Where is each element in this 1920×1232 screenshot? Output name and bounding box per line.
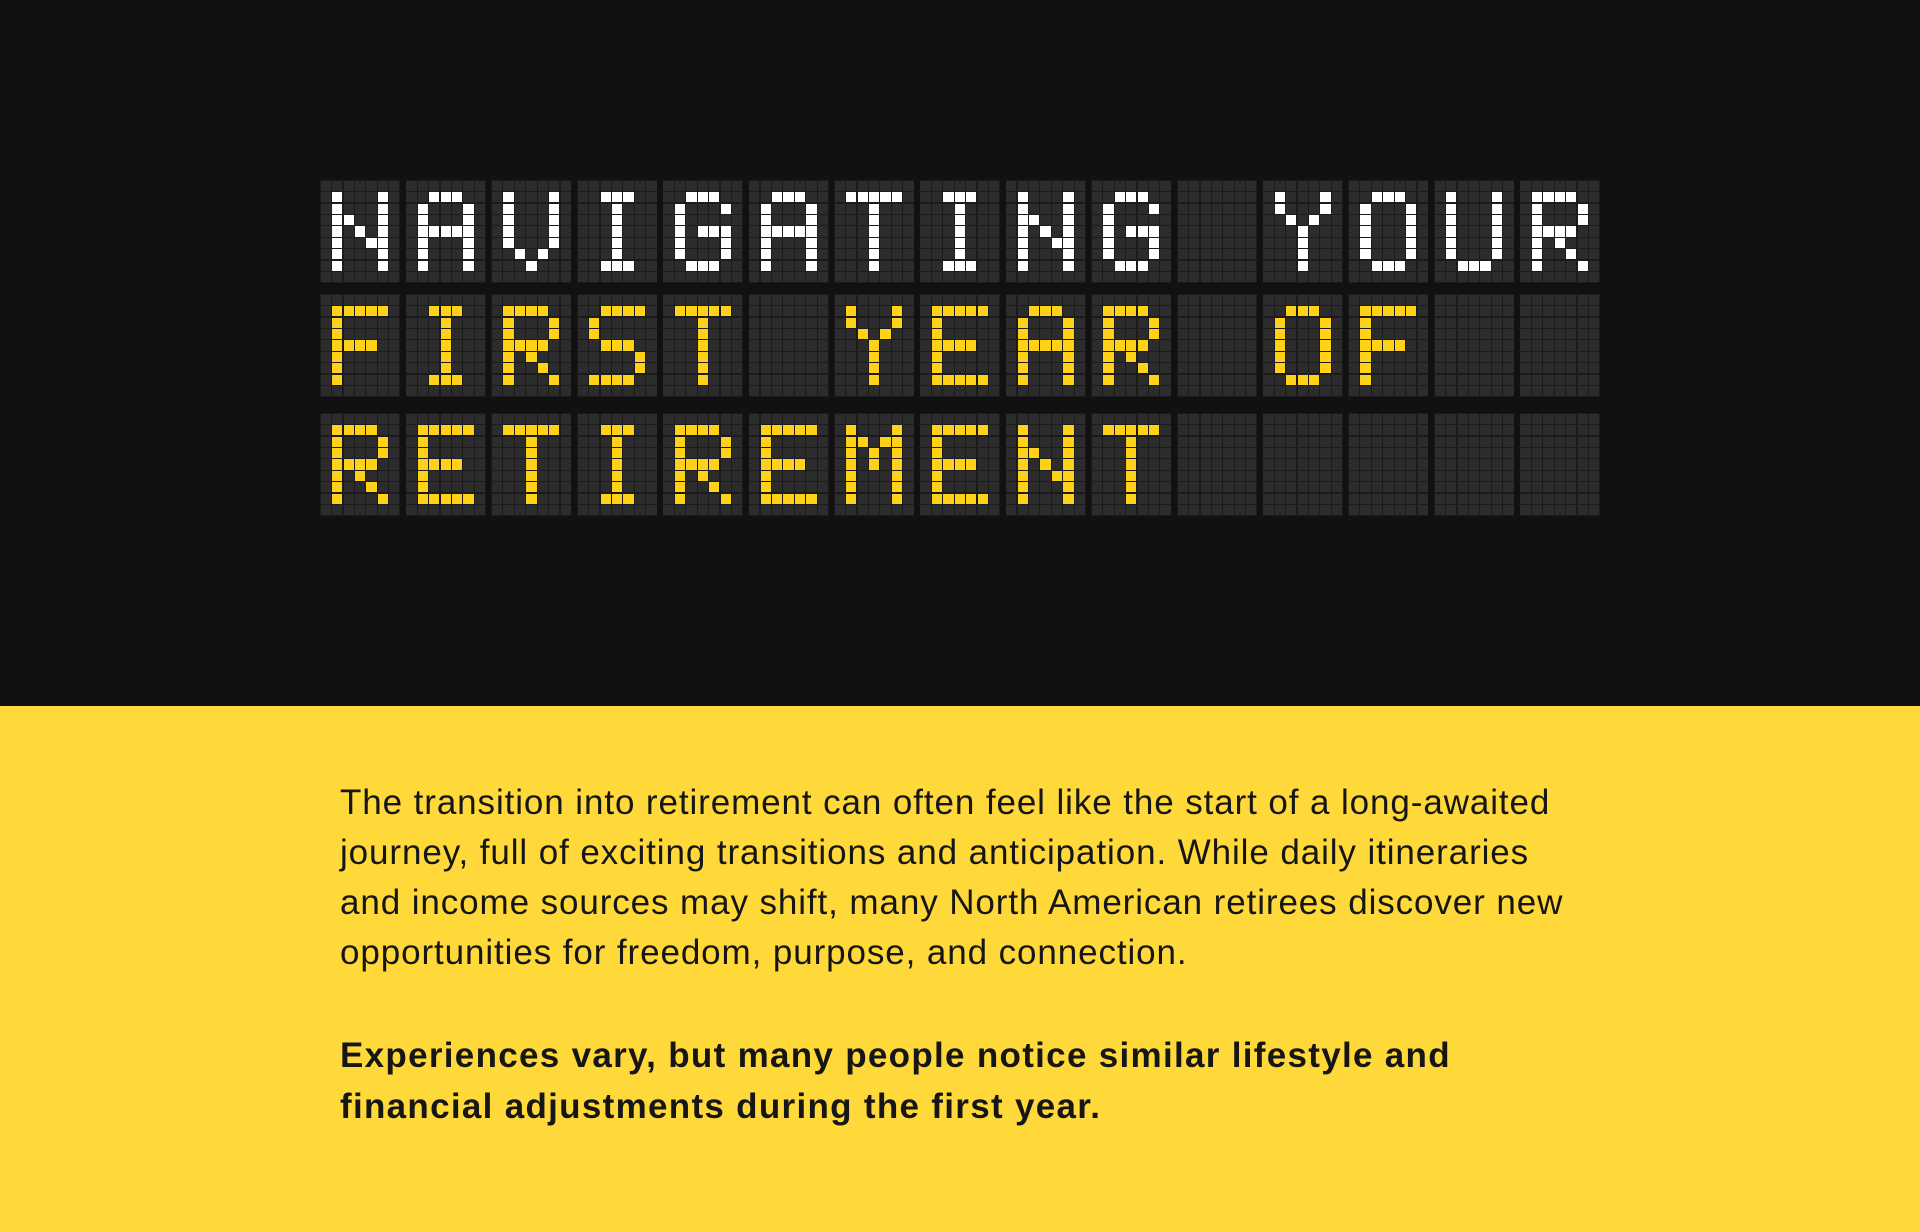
title text xyxy=(320,180,1605,516)
intro paragraph: journey, full of exciting transitions and anticipation. While daily itineraries xyxy=(340,833,1529,872)
title board row 3 xyxy=(320,413,1600,516)
header panel: black board xyxy=(0,0,1920,706)
intro paragraph xyxy=(339,783,1563,972)
title board row 2 xyxy=(320,294,1600,397)
intro paragraph: opportunities for freedom, purpose, and connection. xyxy=(340,933,1188,972)
intro panel: yellow xyxy=(0,706,1920,1232)
intro paragraph: The transition into retirement can often feel like the start of a long-awaited xyxy=(340,783,1550,822)
bold key message: Experiences vary, but many people notice similar lifestyle and xyxy=(340,1036,1451,1075)
bold key message: financial adjustments during the first year. xyxy=(340,1087,1101,1126)
bold key message xyxy=(340,1036,1451,1126)
intro paragraph: and income sources may shift, many North American retirees discover new xyxy=(340,883,1563,922)
title board row 1 xyxy=(320,180,1600,283)
